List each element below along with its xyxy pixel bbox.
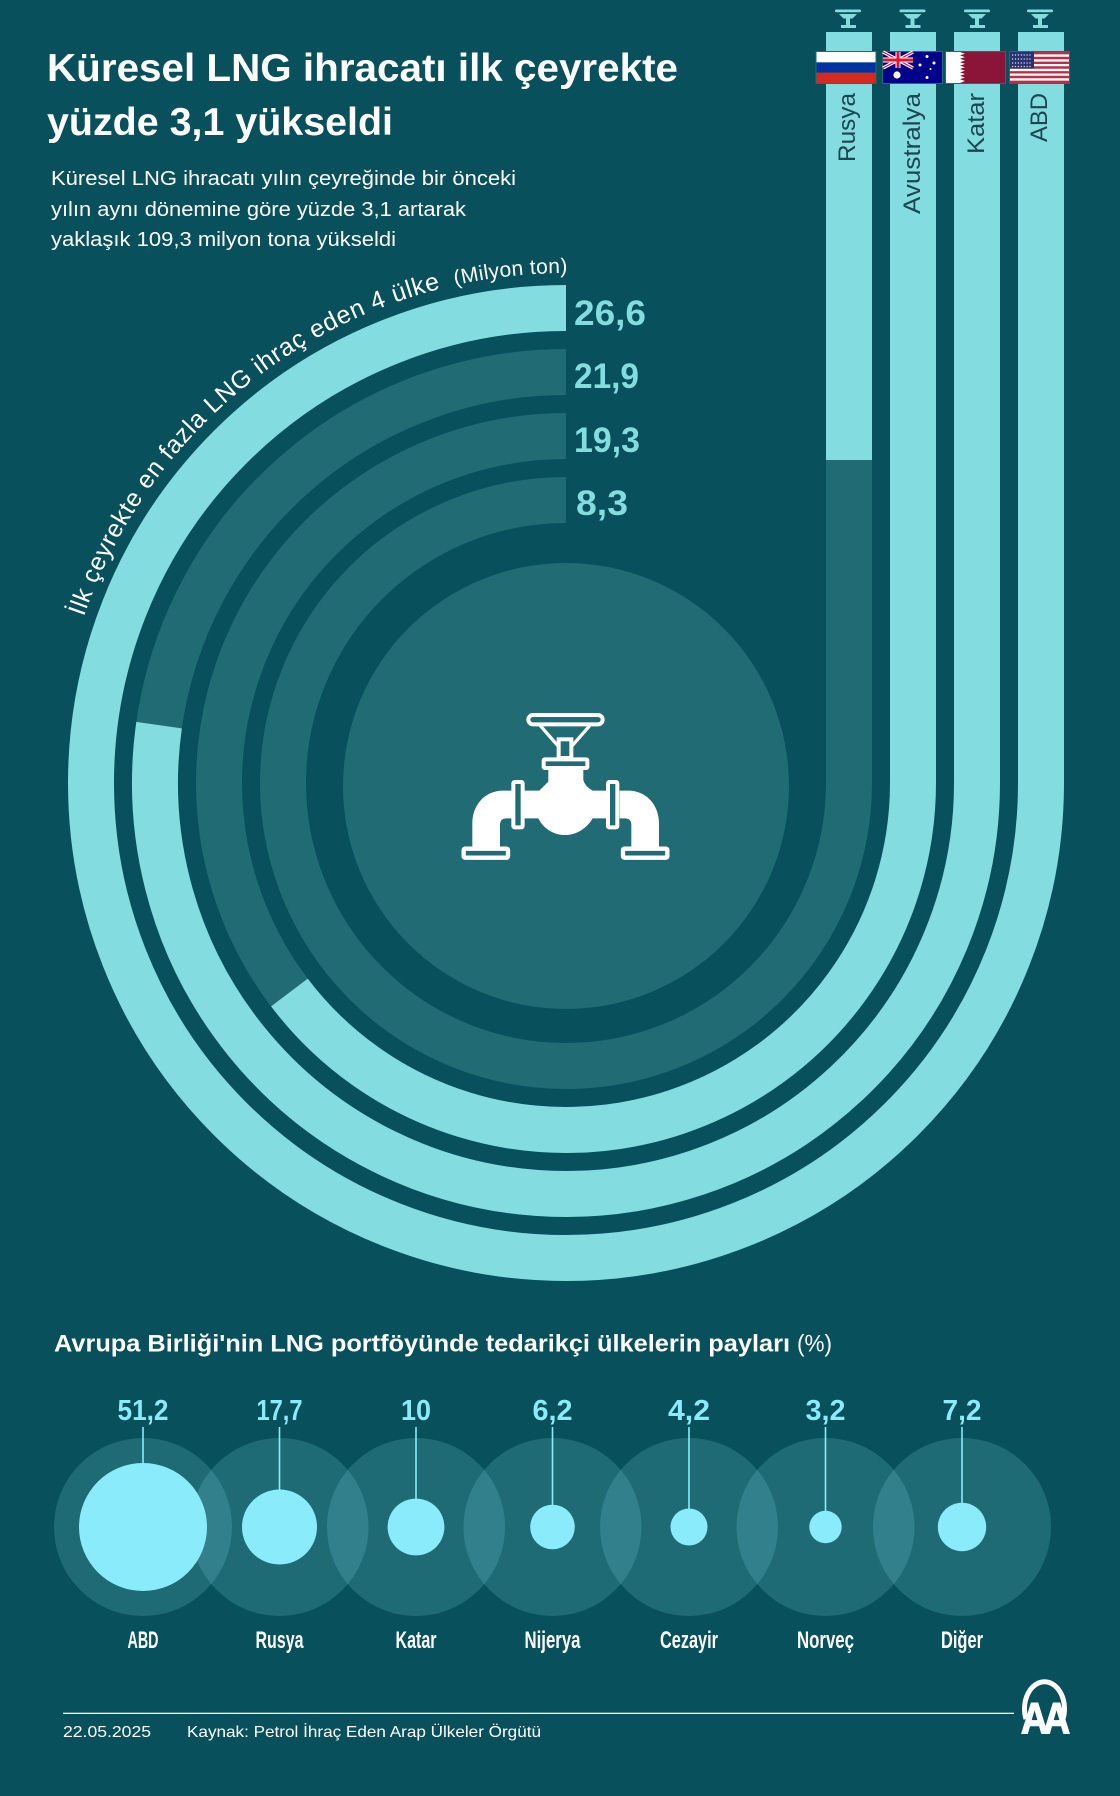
ring values: 21,9	[574, 357, 639, 396]
share values: 6,2	[532, 1395, 572, 1427]
share values: 10	[401, 1395, 431, 1427]
flag: Qatar	[945, 51, 1006, 84]
share values	[118, 1395, 982, 1427]
supplier names: Diğer	[941, 1627, 983, 1654]
country labels on vertical bars: ABD	[1026, 93, 1053, 142]
intro text: Küresel LNG ihracatı yılın çeyreğinde bir önceki	[51, 168, 516, 190]
date: 22.05.2025	[63, 1724, 151, 1741]
share values: 4,2	[668, 1395, 710, 1427]
flag: Russia	[816, 51, 876, 84]
footer	[63, 1713, 1014, 1741]
unit note: (Milyon ton)	[454, 258, 566, 288]
section heading: EU LNG portfolio: (%)	[797, 1330, 832, 1358]
intro text: yaklaşık 109,3 milyon tona yükseldi	[51, 229, 396, 251]
ring values: 19,3	[574, 421, 640, 460]
arc label	[64, 258, 566, 615]
background discs	[54, 1438, 1051, 1616]
supplier names: Rusya	[256, 1627, 304, 1654]
icon: pipeline valve	[464, 715, 667, 858]
supplier names: Katar	[396, 1627, 436, 1654]
source: Kaynak: Petrol İhraç Eden Arap Ülkeler Örgütü	[187, 1722, 541, 1741]
country labels on vertical bars: Katar	[963, 93, 990, 154]
bar: Katar 21,9	[155, 32, 977, 1194]
center circle	[343, 563, 789, 1009]
ring values: 8,3	[576, 484, 628, 523]
ring values: 26,6	[574, 294, 646, 333]
share values: 51,2	[118, 1395, 168, 1427]
supplier names: Norveç	[797, 1627, 854, 1654]
supplier names: Cezayir	[660, 1627, 718, 1654]
arc heading text: İlk çeyrekte en fazla LNG ihraç eden 4 ülke	[64, 277, 438, 615]
flag: Australia	[882, 51, 943, 84]
country labels on vertical bars: Rusya	[834, 92, 861, 162]
supplier names	[128, 1627, 983, 1654]
intro text: yılın aynı dönemine göre yüzde 3,1 artarak	[51, 199, 467, 221]
title	[47, 47, 678, 144]
bar: Avustralya 19,3	[219, 32, 913, 1130]
bar: ABD 26,6	[91, 32, 1041, 1258]
title: yüzde 3,1 yükseldi	[47, 101, 393, 144]
chart: radial pipe bars of top 4 exporters	[91, 32, 1041, 1258]
supplier names: ABD	[128, 1627, 158, 1654]
title: Küresel LNG ihracatı ilk çeyrekte	[47, 47, 678, 90]
intro text	[51, 168, 516, 251]
bar: Rusya 8,3	[283, 32, 849, 1066]
icon: pipe valves on bar tops	[835, 10, 1053, 28]
share circles	[79, 1463, 986, 1591]
supplier names: Nijerya	[524, 1627, 581, 1654]
ring values	[574, 294, 646, 523]
country labels on vertical bars: Avustralya	[899, 92, 926, 214]
flag: USA	[1009, 51, 1070, 84]
country labels on vertical bars	[834, 92, 1053, 214]
bubble chart: supplier shares	[54, 1395, 1051, 1654]
section heading: EU LNG portfolio: Avrupa Birliği'nin LNG portföyünde tedarikçi ülkelerin payları	[54, 1330, 790, 1358]
logo: AA: AA	[1021, 1694, 1069, 1743]
leader lines	[143, 1427, 962, 1516]
share values: 7,2	[942, 1395, 982, 1427]
share values: 17,7	[256, 1395, 302, 1427]
share values: 3,2	[806, 1395, 846, 1427]
